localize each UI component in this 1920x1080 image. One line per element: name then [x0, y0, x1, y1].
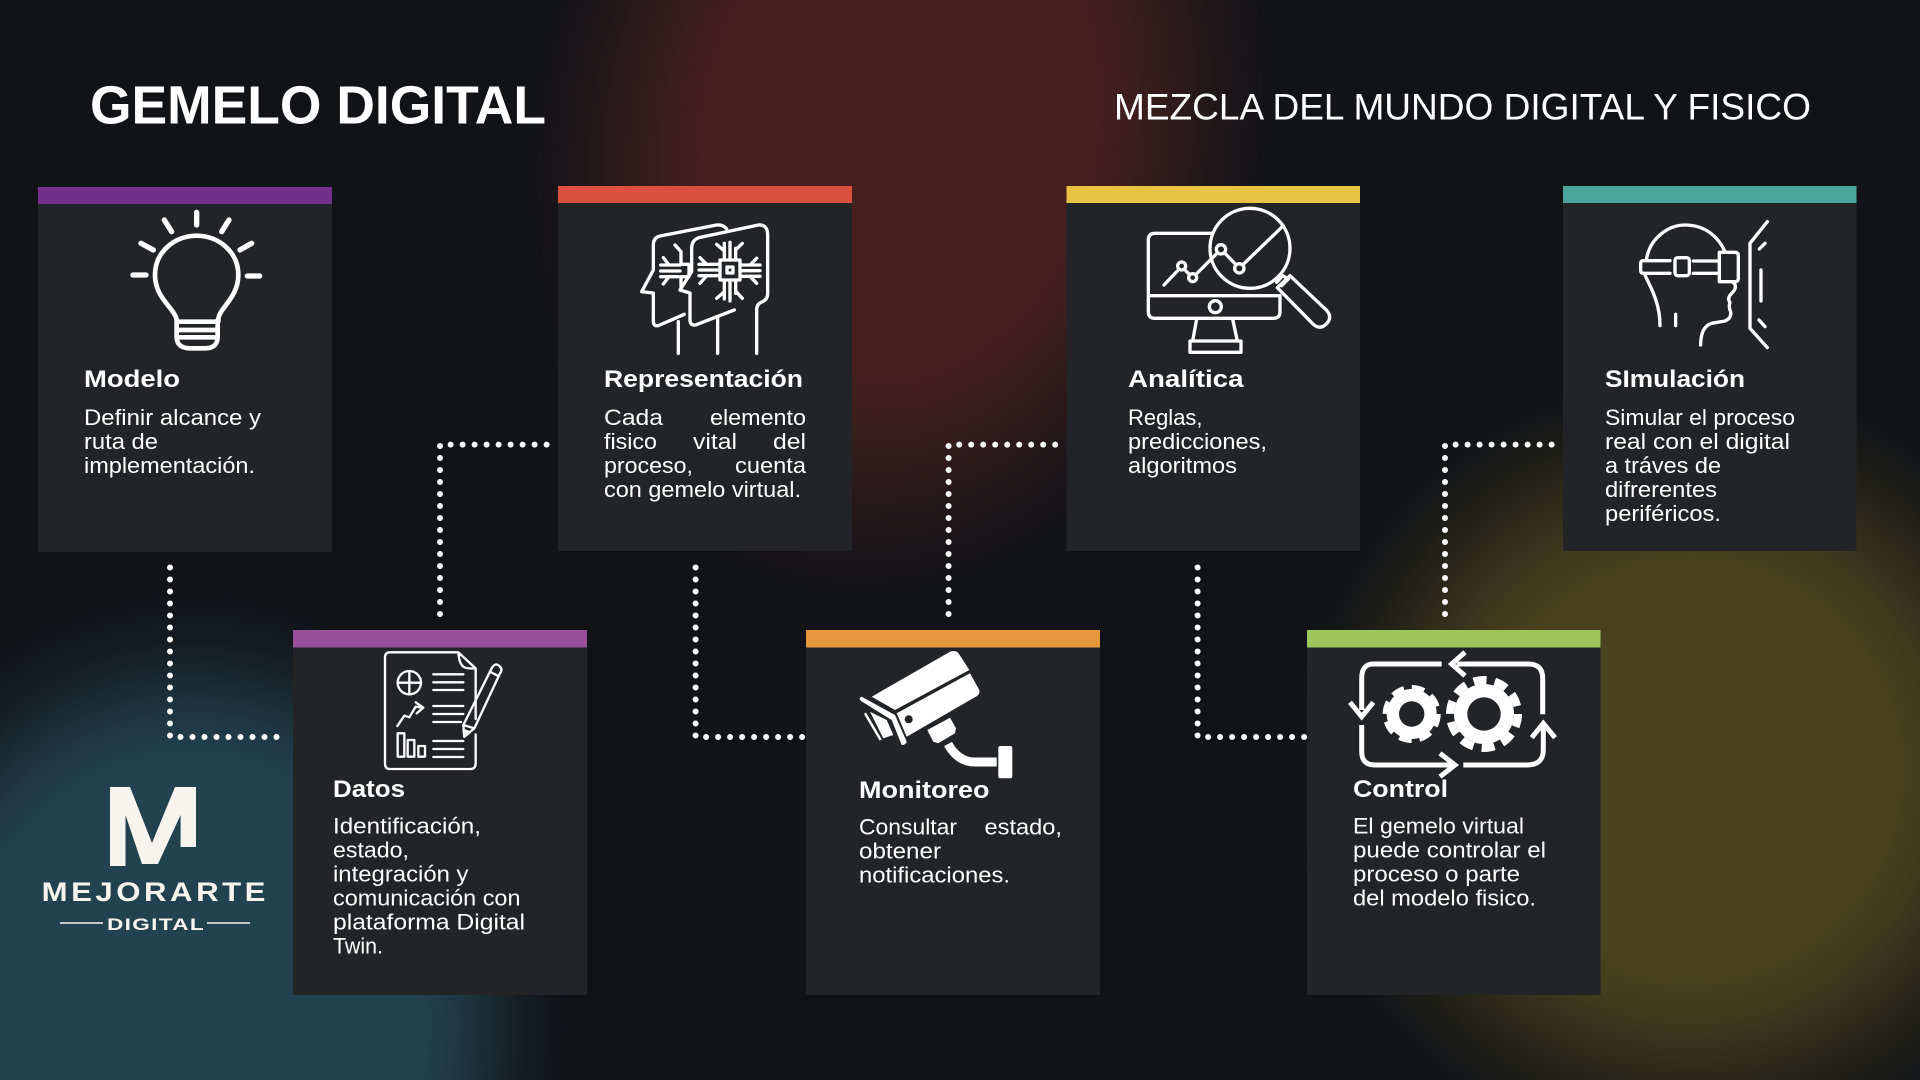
- text: ruta de: [84, 429, 158, 454]
- panel: Monitoreo: [806, 630, 1100, 995]
- text: comunicación con: [333, 886, 520, 910]
- text: con gemelo virtual.: [604, 477, 801, 502]
- text: implementación.: [84, 453, 255, 478]
- connector: Representación to Monitoreo: [696, 568, 805, 737]
- text: algoritmos: [1128, 453, 1237, 478]
- text: estado,: [333, 838, 409, 862]
- panel: Representación: [558, 186, 852, 551]
- text: [1128, 405, 1267, 478]
- title: GEMELO DIGITAL: [90, 76, 546, 136]
- text: Identificación,: [333, 814, 481, 838]
- text: Cada: [604, 405, 664, 430]
- heading: Datos: [333, 776, 405, 803]
- heading: Analítica: [1128, 366, 1244, 393]
- icon: two heads with chips: [642, 225, 768, 353]
- text: fisico: [604, 429, 657, 454]
- text: Definir alcance y: [84, 405, 261, 430]
- connector: Analítica to Control: [1198, 568, 1306, 737]
- text: [333, 814, 525, 958]
- text: del: [773, 429, 806, 454]
- connector: Control to Simulación: [1445, 445, 1555, 614]
- text: Reglas,: [1128, 405, 1202, 430]
- panel: Modelo: [38, 187, 332, 552]
- icon: document with charts and pencil: [385, 652, 501, 769]
- logo: Mejorarte Digital: MEJORARTE: [42, 877, 269, 907]
- heading: SImulación: [1605, 366, 1745, 393]
- text: plataforma Digital: [333, 910, 525, 934]
- icon: head with VR headset: [1641, 222, 1767, 348]
- subtitle: MEZCLA DEL MUNDO DIGITAL Y FISICO: [1114, 86, 1811, 128]
- text: proceso,: [604, 453, 693, 478]
- text: [1605, 405, 1795, 526]
- connector: Monitoreo to Analítica: [949, 445, 1059, 614]
- text: elemento: [710, 405, 806, 430]
- heading: Representación: [604, 366, 803, 393]
- text: integración y: [333, 862, 468, 886]
- text: notificaciones.: [859, 862, 1010, 888]
- panel: Datos: [293, 630, 587, 995]
- text: Simular el proceso: [1605, 405, 1795, 430]
- heading: Monitoreo: [859, 777, 990, 804]
- text: proceso o parte: [1353, 862, 1520, 886]
- icon: monitor and magnifier: [1148, 208, 1330, 352]
- text: obtener: [859, 838, 941, 864]
- logo: Mejorarte Digital: DIGITAL: [107, 915, 205, 934]
- connector: Modelo to Datos: [170, 568, 278, 737]
- text: [604, 405, 807, 502]
- heading: Control: [1353, 776, 1448, 803]
- heading: Modelo: [84, 366, 180, 393]
- panel: Simulación: [1563, 186, 1856, 551]
- connector: Datos to Representación: [440, 445, 550, 614]
- text: [84, 405, 261, 478]
- text: puede controlar el: [1353, 838, 1546, 862]
- icon: gears with cycle arrows: [1350, 652, 1555, 777]
- text: El gemelo virtual: [1353, 814, 1524, 838]
- text: [1353, 814, 1546, 910]
- text: vital: [693, 429, 737, 454]
- panel: Analítica: [1066, 186, 1360, 551]
- icon: security camera: [860, 651, 1012, 778]
- text: real con el digital: [1605, 429, 1790, 454]
- text: difrerentes: [1605, 477, 1717, 502]
- panel: Control: [1307, 630, 1600, 995]
- text: predicciones,: [1128, 429, 1267, 454]
- text: Twin.: [333, 934, 383, 958]
- text: periféricos.: [1605, 501, 1721, 526]
- text: cuenta: [735, 453, 807, 478]
- logo: Mejorarte Digital: [42, 787, 269, 934]
- icon: light bulb: [133, 212, 260, 348]
- text: a tráves de: [1605, 453, 1721, 478]
- text: del modelo fisico.: [1353, 886, 1536, 910]
- text: estado,: [984, 814, 1062, 840]
- text: [859, 814, 1062, 888]
- text: Consultar: [859, 814, 957, 840]
